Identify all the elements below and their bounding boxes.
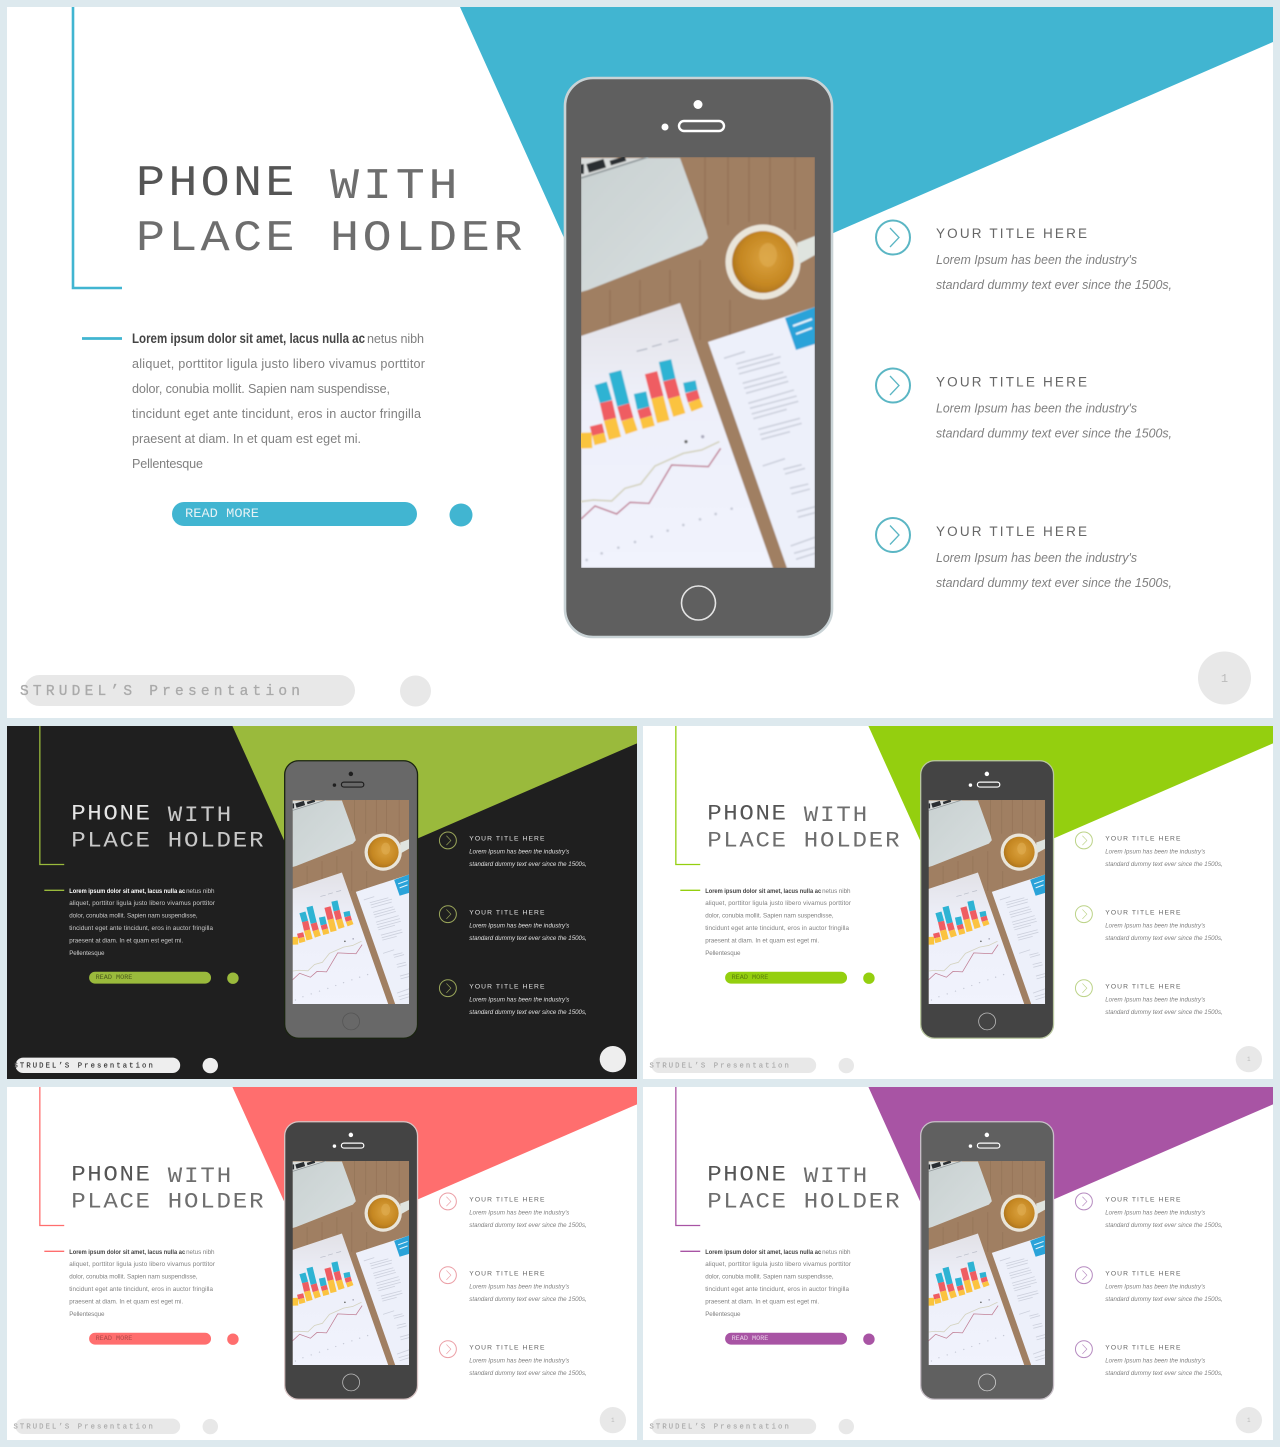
body paragraph bbox=[705, 888, 851, 957]
item 1: Lorem Ipsum has been the industry's bbox=[469, 1210, 570, 1217]
title bracket bbox=[73, 7, 122, 288]
title bracket bbox=[676, 1087, 700, 1226]
item 3 bbox=[876, 518, 1172, 590]
item 3 bbox=[439, 1341, 587, 1377]
page number bbox=[1236, 1046, 1262, 1072]
phone mockup bbox=[921, 1122, 1054, 1399]
item 3: Lorem Ipsum has been the industry's bbox=[469, 997, 570, 1004]
body paragraph: praesent at diam. In et quam est eget mi. bbox=[705, 1298, 819, 1305]
page number bbox=[1236, 1407, 1262, 1433]
page number bbox=[600, 1407, 626, 1433]
page number bbox=[1198, 652, 1251, 704]
body paragraph: netus nibh bbox=[367, 332, 424, 346]
footer pill bbox=[649, 1419, 816, 1434]
title bracket bbox=[40, 1087, 64, 1226]
slide 5: purple light layout bbox=[643, 1087, 1273, 1440]
body paragraph: Lorem ipsum dolor sit amet, lacus nulla ac bbox=[705, 888, 821, 895]
footer pill: STRUDEL’S Presentation bbox=[649, 1424, 789, 1432]
item 2 bbox=[876, 368, 1172, 440]
title: PHONE bbox=[136, 158, 294, 208]
item 1 bbox=[439, 1193, 587, 1229]
footer pill bbox=[649, 1058, 816, 1073]
body paragraph: dolor, conubia mollit. Sapien nam suspendisse, bbox=[705, 1274, 834, 1281]
phone screen photo bbox=[286, 1161, 409, 1365]
read more button bbox=[172, 502, 417, 526]
item 3: standard dummy text ever since the 1500s, bbox=[469, 1370, 587, 1377]
background wedge bbox=[460, 7, 1273, 291]
item 2: standard dummy text ever since the 1500s, bbox=[469, 935, 587, 942]
body paragraph: Pellentesque bbox=[69, 1311, 105, 1318]
body paragraph: netus nibh bbox=[186, 1249, 215, 1256]
body paragraph: tincidunt eget ante tincidunt, eros in auctor fringilla bbox=[69, 1286, 214, 1293]
slide 3: lime light layout bbox=[643, 726, 1273, 1079]
item 3: Lorem Ipsum has been the industry's bbox=[469, 1358, 570, 1365]
title: PHONE bbox=[71, 801, 150, 826]
item 3: YOUR TITLE HERE bbox=[469, 984, 545, 991]
title: PHONE bbox=[707, 801, 786, 826]
slide 2: dark green layout bbox=[7, 726, 637, 1079]
body paragraph: Lorem ipsum dolor sit amet, lacus nulla ac bbox=[69, 1249, 185, 1256]
item 2 bbox=[439, 906, 587, 942]
item 2: Lorem Ipsum has been the industry's bbox=[469, 923, 570, 930]
item 1 bbox=[439, 832, 587, 868]
item 2: Lorem Ipsum has been the industry's bbox=[1105, 1284, 1206, 1291]
background wedge bbox=[232, 726, 637, 867]
page number: 1 bbox=[611, 1417, 615, 1424]
page number bbox=[600, 1046, 626, 1072]
button dot bbox=[863, 973, 875, 984]
read more button: READ MORE bbox=[732, 974, 769, 981]
item 1: standard dummy text ever since the 1500s, bbox=[1105, 1222, 1223, 1229]
footer dot bbox=[839, 1058, 854, 1073]
item 2: standard dummy text ever since the 1500s, bbox=[936, 426, 1172, 440]
slide 4: coral light layout bbox=[7, 1087, 637, 1440]
item 2: YOUR TITLE HERE bbox=[936, 374, 1087, 390]
title: PLACE bbox=[136, 213, 294, 263]
item 3 bbox=[439, 980, 587, 1016]
body paragraph: praesent at diam. In et quam est eget mi. bbox=[705, 937, 819, 944]
body paragraph: Pellentesque bbox=[69, 950, 105, 957]
accent dash bbox=[680, 889, 700, 892]
footer dot bbox=[400, 676, 431, 706]
title bbox=[71, 1162, 264, 1214]
body paragraph: Pellentesque bbox=[705, 950, 741, 957]
button dot bbox=[227, 973, 239, 984]
item 2: Lorem Ipsum has been the industry's bbox=[936, 400, 1137, 416]
item 3: Lorem Ipsum has been the industry's bbox=[1105, 997, 1206, 1004]
body paragraph: aliquet, porttitor ligula justo libero vivamus porttitor bbox=[705, 900, 851, 907]
page number: 1 bbox=[611, 1056, 615, 1063]
item 1: Lorem Ipsum has been the industry's bbox=[1105, 849, 1206, 856]
phone screen photo bbox=[567, 156, 815, 568]
item 1 bbox=[1075, 832, 1223, 868]
item 1: Lorem Ipsum has been the industry's bbox=[1105, 1210, 1206, 1217]
title: WITH bbox=[330, 161, 458, 211]
title: PLACE bbox=[71, 1190, 150, 1214]
phone screen photo bbox=[922, 800, 1045, 1004]
button dot bbox=[450, 504, 472, 526]
title: WITH bbox=[168, 1164, 231, 1188]
phone mockup bbox=[285, 1122, 418, 1399]
item 2: standard dummy text ever since the 1500s, bbox=[1105, 935, 1223, 942]
body paragraph: dolor, conubia mollit. Sapien nam suspendisse, bbox=[69, 913, 198, 920]
accent dash bbox=[82, 337, 122, 340]
phone screen photo bbox=[922, 1161, 1045, 1365]
item 3: YOUR TITLE HERE bbox=[936, 524, 1087, 539]
phone screen photo bbox=[286, 800, 409, 1004]
background wedge bbox=[868, 1087, 1273, 1228]
body paragraph: aliquet, porttitor ligula justo libero vivamus porttitor bbox=[705, 1261, 851, 1268]
title: HOLDER bbox=[168, 1190, 264, 1214]
item 1 bbox=[876, 220, 1172, 292]
accent dash bbox=[680, 1250, 700, 1253]
title: HOLDER bbox=[804, 829, 900, 853]
body paragraph: tincidunt eget ante tincidunt, eros in auctor fringilla bbox=[69, 925, 214, 932]
body paragraph: tincidunt eget ante tincidunt, eros in auctor fringilla bbox=[705, 1286, 850, 1293]
title bracket bbox=[40, 726, 64, 865]
title: PLACE bbox=[71, 829, 150, 853]
body paragraph bbox=[132, 331, 425, 471]
title bracket bbox=[676, 726, 700, 865]
item 3: standard dummy text ever since the 1500s, bbox=[469, 1009, 587, 1016]
body paragraph: dolor, conubia mollit. Sapien nam suspendisse, bbox=[705, 913, 834, 920]
body paragraph: aliquet, porttitor ligula justo libero vivamus porttitor bbox=[132, 357, 425, 371]
read more button: READ MORE bbox=[96, 1335, 133, 1342]
phone mockup bbox=[285, 761, 418, 1038]
body paragraph: praesent at diam. In et quam est eget mi. bbox=[69, 937, 183, 944]
body paragraph bbox=[69, 1249, 215, 1318]
body paragraph: Lorem ipsum dolor sit amet, lacus nulla ac bbox=[705, 1249, 821, 1256]
title: HOLDER bbox=[804, 1190, 900, 1214]
item 2: standard dummy text ever since the 1500s, bbox=[1105, 1296, 1223, 1303]
footer pill: STRUDEL’S Presentation bbox=[13, 1424, 153, 1432]
read more button bbox=[89, 972, 211, 984]
title: PLACE bbox=[707, 829, 786, 853]
footer pill bbox=[13, 1058, 180, 1073]
read more button: READ MORE bbox=[96, 974, 133, 981]
item 1: Lorem Ipsum has been the industry's bbox=[936, 252, 1137, 267]
item 3: Lorem Ipsum has been the industry's bbox=[936, 550, 1137, 565]
body paragraph: Pellentesque bbox=[132, 457, 203, 471]
body paragraph bbox=[705, 1249, 851, 1318]
button dot bbox=[227, 1334, 239, 1345]
title: HOLDER bbox=[168, 829, 264, 853]
body paragraph: Lorem ipsum dolor sit amet, lacus nulla ac bbox=[69, 888, 185, 895]
item 2 bbox=[439, 1267, 587, 1303]
body paragraph: praesent at diam. In et quam est eget mi. bbox=[69, 1298, 183, 1305]
title: WITH bbox=[804, 1164, 867, 1188]
item 2 bbox=[1075, 906, 1223, 942]
item 2: Lorem Ipsum has been the industry's bbox=[1105, 923, 1206, 930]
item 1: YOUR TITLE HERE bbox=[936, 226, 1087, 241]
read more button: READ MORE bbox=[732, 1335, 769, 1342]
item 2: standard dummy text ever since the 1500s, bbox=[469, 1296, 587, 1303]
item 3: YOUR TITLE HERE bbox=[1105, 984, 1181, 991]
read more button bbox=[725, 972, 847, 984]
item 2 bbox=[1075, 1267, 1223, 1303]
button dot bbox=[863, 1334, 875, 1345]
footer pill: STRUDEL’S Presentation bbox=[20, 684, 300, 700]
accent dash bbox=[44, 1250, 64, 1253]
footer dot bbox=[203, 1058, 218, 1073]
item 3: YOUR TITLE HERE bbox=[469, 1345, 545, 1352]
item 2: YOUR TITLE HERE bbox=[469, 910, 545, 917]
body paragraph: netus nibh bbox=[822, 1249, 851, 1256]
item 1: YOUR TITLE HERE bbox=[469, 836, 545, 843]
title: PLACE bbox=[707, 1190, 786, 1214]
item 1: standard dummy text ever since the 1500s, bbox=[936, 277, 1172, 292]
background wedge bbox=[232, 1087, 637, 1228]
title bbox=[71, 801, 264, 853]
title bbox=[136, 158, 522, 263]
item 1: standard dummy text ever since the 1500s, bbox=[1105, 861, 1223, 868]
page number: 1 bbox=[1221, 672, 1228, 686]
title: WITH bbox=[804, 803, 867, 827]
read more button bbox=[89, 1333, 211, 1345]
slide 1: teal light layout bbox=[7, 7, 1273, 718]
item 1: YOUR TITLE HERE bbox=[1105, 836, 1181, 843]
item 2: YOUR TITLE HERE bbox=[1105, 1271, 1181, 1278]
item 3: Lorem Ipsum has been the industry's bbox=[1105, 1358, 1206, 1365]
item 1: standard dummy text ever since the 1500s, bbox=[469, 861, 587, 868]
footer dot bbox=[839, 1419, 854, 1434]
item 2: YOUR TITLE HERE bbox=[1105, 910, 1181, 917]
body paragraph: dolor, conubia mollit. Sapien nam suspendisse, bbox=[132, 382, 390, 396]
item 2: YOUR TITLE HERE bbox=[469, 1271, 545, 1278]
footer pill bbox=[20, 675, 355, 706]
item 3: YOUR TITLE HERE bbox=[1105, 1345, 1181, 1352]
background wedge bbox=[868, 726, 1273, 867]
body paragraph: netus nibh bbox=[186, 888, 215, 895]
footer dot bbox=[203, 1419, 218, 1434]
body paragraph: netus nibh bbox=[822, 888, 851, 895]
body paragraph: aliquet, porttitor ligula justo libero vivamus porttitor bbox=[69, 1261, 215, 1268]
item 3 bbox=[1075, 1341, 1223, 1377]
item 1: standard dummy text ever since the 1500s, bbox=[469, 1222, 587, 1229]
accent dash bbox=[44, 889, 64, 892]
item 2: Lorem Ipsum has been the industry's bbox=[469, 1284, 570, 1291]
phone mockup bbox=[921, 761, 1054, 1038]
title: PHONE bbox=[707, 1162, 786, 1187]
item 3: standard dummy text ever since the 1500s, bbox=[1105, 1009, 1223, 1016]
title: PHONE bbox=[71, 1162, 150, 1187]
item 1: YOUR TITLE HERE bbox=[1105, 1197, 1181, 1204]
body paragraph: Pellentesque bbox=[705, 1311, 741, 1318]
body paragraph: tincidunt eget ante tincidunt, eros in auctor fringilla bbox=[705, 925, 850, 932]
footer pill: STRUDEL’S Presentation bbox=[649, 1063, 789, 1071]
item 1 bbox=[1075, 1193, 1223, 1229]
body paragraph: aliquet, porttitor ligula justo libero vivamus porttitor bbox=[69, 900, 215, 907]
body paragraph: dolor, conubia mollit. Sapien nam suspendisse, bbox=[69, 1274, 198, 1281]
body paragraph: praesent at diam. In et quam est eget mi. bbox=[132, 432, 361, 446]
body paragraph: Lorem ipsum dolor sit amet, lacus nulla ac bbox=[132, 331, 365, 346]
item 3: standard dummy text ever since the 1500s, bbox=[936, 575, 1172, 590]
body paragraph bbox=[69, 888, 215, 957]
item 3 bbox=[1075, 980, 1223, 1016]
title bbox=[707, 801, 900, 853]
read more button bbox=[725, 1333, 847, 1345]
item 1: Lorem Ipsum has been the industry's bbox=[469, 849, 570, 856]
page number: 1 bbox=[1247, 1417, 1251, 1424]
footer pill bbox=[13, 1419, 180, 1434]
page number: 1 bbox=[1247, 1056, 1251, 1063]
footer pill: STRUDEL’S Presentation bbox=[13, 1063, 153, 1071]
item 1: YOUR TITLE HERE bbox=[469, 1197, 545, 1204]
body paragraph: tincidunt eget ante tincidunt, eros in auctor fringilla bbox=[132, 407, 421, 421]
item 3: standard dummy text ever since the 1500s, bbox=[1105, 1370, 1223, 1377]
phone mockup bbox=[565, 78, 832, 637]
title: HOLDER bbox=[330, 213, 523, 263]
read more button: READ MORE bbox=[185, 506, 259, 521]
title: WITH bbox=[168, 803, 231, 827]
title bbox=[707, 1162, 900, 1214]
